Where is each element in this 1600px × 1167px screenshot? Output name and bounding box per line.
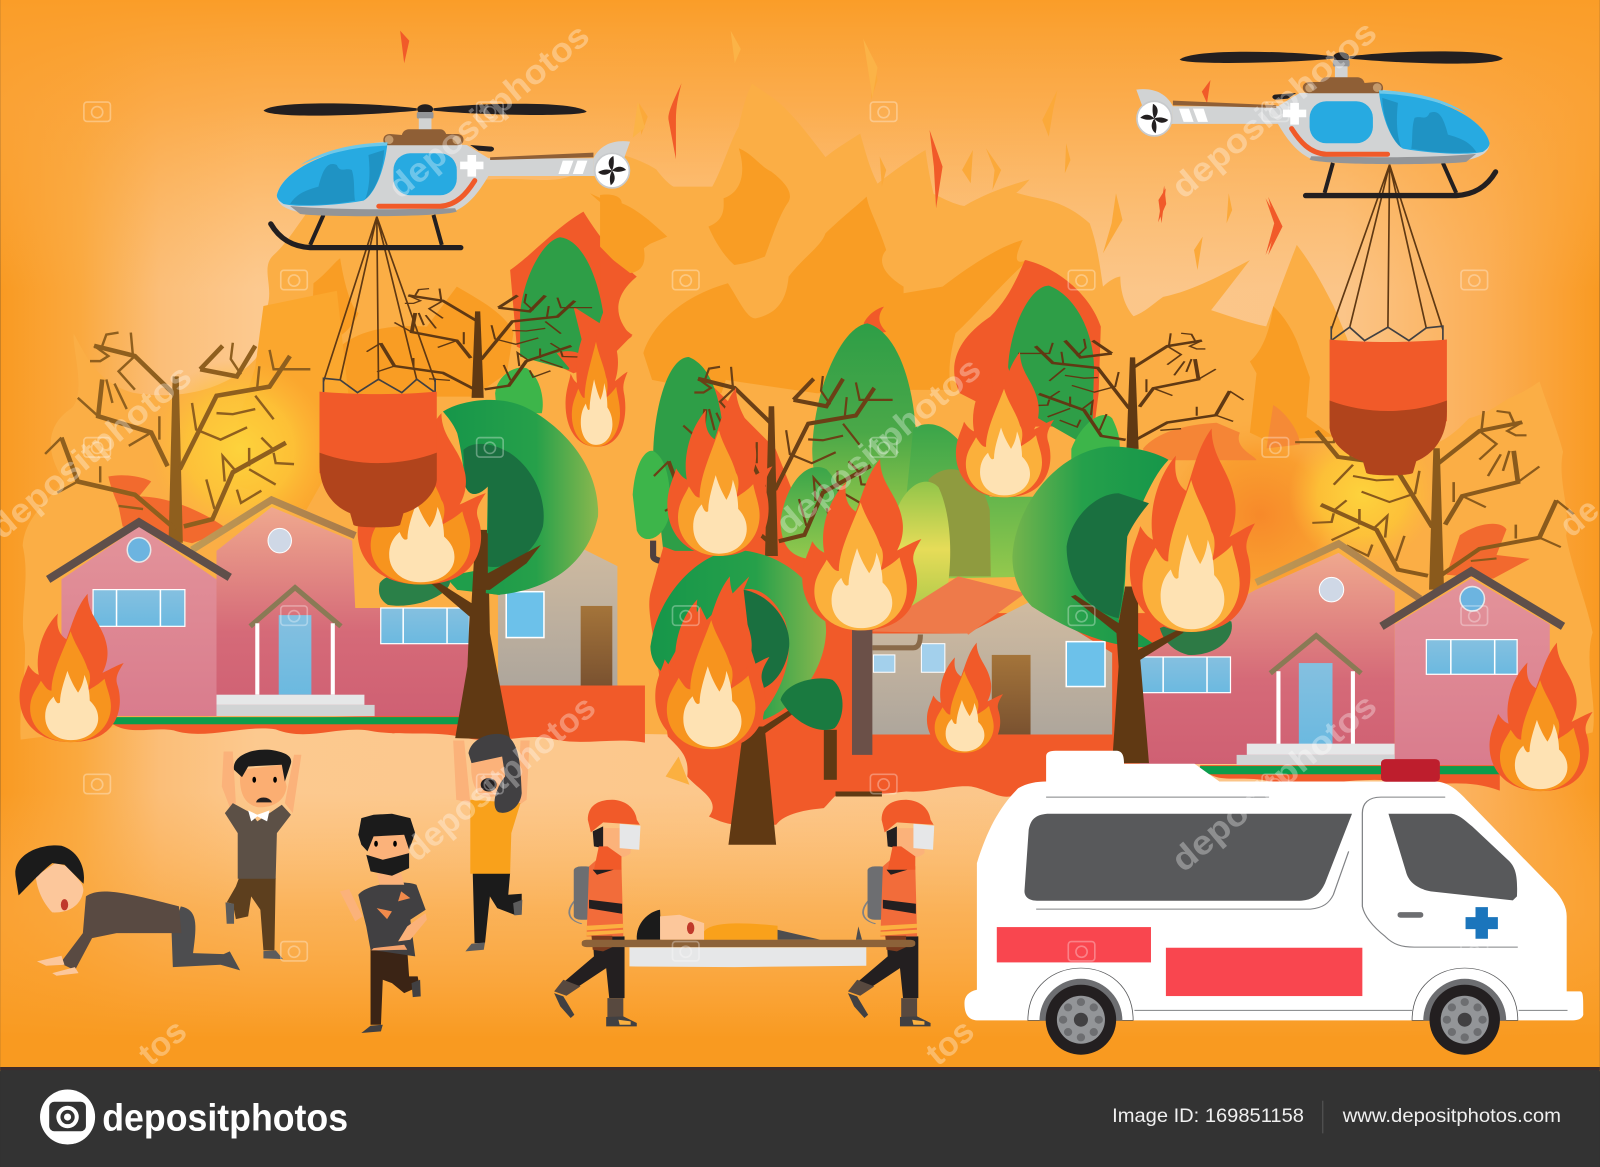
flame behind house left bbox=[108, 475, 229, 543]
fire: house bbox=[927, 643, 1003, 753]
watermark: depositphotos bbox=[769, 350, 988, 543]
watermark: tos bbox=[132, 1012, 194, 1073]
helicopter left with water bucket bbox=[263, 103, 630, 527]
fire: ground left bbox=[20, 594, 124, 742]
person crawling bbox=[15, 845, 240, 976]
stretcher team bbox=[554, 800, 934, 1026]
lawn right bbox=[1200, 766, 1500, 774]
footer logo icon bbox=[40, 1089, 95, 1145]
bare tree 5 bbox=[1295, 411, 1574, 590]
embers far bbox=[400, 31, 1283, 255]
house: pink large right bbox=[1140, 544, 1420, 765]
watermark: depositphotos bbox=[398, 689, 603, 869]
fire: small behind tree bbox=[566, 306, 628, 447]
back green trees bbox=[633, 286, 1120, 653]
watermark: depositphotos bbox=[381, 17, 597, 206]
fire: centre high bbox=[667, 388, 772, 556]
trunk pole bbox=[852, 630, 872, 755]
small tree bbox=[780, 678, 843, 780]
yellow fire glow left bbox=[150, 359, 330, 539]
stretcher with patient bbox=[582, 910, 915, 967]
helicopter right with water bucket bbox=[1136, 51, 1503, 475]
bare tree 3 bbox=[654, 367, 893, 556]
man with raised arms bbox=[222, 750, 301, 959]
dark flame: centre bbox=[600, 148, 1101, 427]
tree front bbox=[650, 550, 882, 845]
mid-tone left bbox=[220, 291, 352, 510]
burning ground right bbox=[1200, 765, 1500, 791]
burning ground centre bbox=[649, 547, 1184, 825]
front wheel bbox=[1412, 968, 1518, 1055]
bare tree 1 bbox=[45, 333, 310, 543]
people bbox=[15, 734, 934, 1033]
dark flame: left of tree bbox=[312, 193, 660, 397]
house: beige centre bbox=[871, 576, 1112, 734]
flames behind house right bbox=[1143, 306, 1530, 579]
background wildfire flames bbox=[20, 84, 1594, 760]
bare tree 4 bbox=[1018, 333, 1244, 449]
watermark: depositphotos bbox=[1165, 14, 1384, 206]
fire: upper right of centre bbox=[956, 352, 1054, 497]
rescuer rear bbox=[554, 800, 640, 1026]
fire: centre low bbox=[655, 576, 769, 749]
lawn left bbox=[110, 717, 461, 724]
website url: www.depositphotos.com bbox=[1342, 1105, 1561, 1127]
bare tree 2 bbox=[367, 289, 592, 398]
house: pink small right bbox=[1381, 571, 1563, 765]
rescuer front bbox=[848, 800, 934, 1026]
rear wheel bbox=[1028, 968, 1133, 1055]
orange glow right bbox=[1153, 413, 1367, 617]
footer band bbox=[0, 1067, 1600, 1167]
fire: ground right bbox=[1489, 643, 1593, 791]
fire: centre bbox=[802, 459, 921, 630]
house: pink large left bbox=[192, 500, 469, 716]
watermark: tos bbox=[919, 1012, 982, 1073]
woman with raised arms bbox=[453, 734, 530, 951]
burning ground left bbox=[110, 686, 645, 743]
image id: Image ID: 169851158 bbox=[1112, 1105, 1304, 1127]
house: pink small left bbox=[48, 522, 230, 716]
green trees right and front bbox=[650, 447, 1232, 845]
tree right bbox=[1012, 447, 1232, 763]
house: grey left bbox=[498, 541, 617, 686]
man with torn clothes bbox=[340, 814, 427, 1033]
yellow flame sliver bbox=[666, 756, 689, 785]
footer logo text: depositphotos bbox=[102, 1096, 348, 1138]
embers bbox=[639, 60, 1280, 270]
yellow fire glow right bbox=[1289, 425, 1436, 564]
fire: right tree bbox=[1130, 428, 1255, 632]
ambulance bbox=[964, 751, 1583, 1055]
watermark: depositphotos bbox=[1165, 687, 1384, 879]
back tree behind bucket left bbox=[495, 237, 605, 413]
green tree left bbox=[379, 400, 598, 740]
fire: under left bucket bbox=[358, 413, 486, 585]
